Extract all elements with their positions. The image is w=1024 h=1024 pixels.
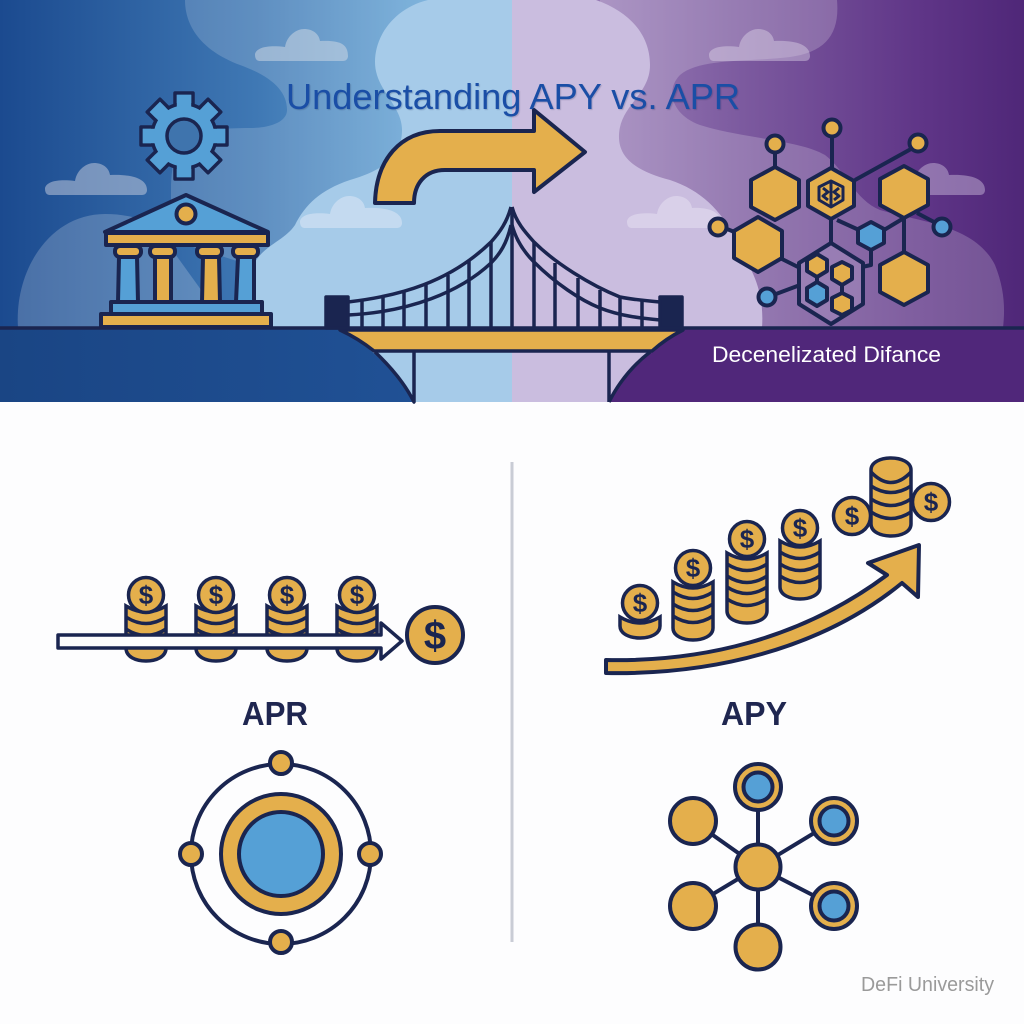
arrow: white timeline arrow — [58, 623, 402, 659]
coin stack — [267, 578, 307, 661]
coin stack: $ — [350, 580, 365, 610]
blue hexagon — [858, 222, 884, 250]
panel: APR — [58, 578, 463, 953]
icon: blockchain hexagon network — [710, 120, 950, 324]
network connectors — [727, 137, 934, 294]
icon: orbit diagram — [180, 752, 381, 953]
right ground — [609, 328, 1024, 402]
hexagon — [880, 166, 928, 218]
icon: bank building — [101, 195, 271, 327]
arrow: compounding growth arrow — [606, 545, 919, 673]
ground line — [0, 326, 1024, 330]
coin stack with side coins — [834, 458, 950, 536]
bridge hangers — [362, 207, 642, 328]
hexagon — [734, 217, 782, 272]
coin stack — [727, 522, 767, 623]
panel: hero banner — [0, 0, 1024, 402]
coin stack — [196, 578, 236, 661]
cloud — [45, 163, 147, 195]
large coin: $ — [424, 614, 446, 658]
coin stack: $ — [686, 553, 701, 583]
coin stack — [620, 586, 660, 638]
heading: APR: APR — [242, 695, 308, 732]
coin stack with side coins: $ — [845, 501, 860, 531]
arrow: big curved arrow — [375, 110, 585, 203]
small hexagons — [807, 254, 852, 315]
title: Understanding APY vs. APR — [286, 76, 740, 117]
bridge towers — [326, 297, 348, 328]
cloud — [884, 163, 985, 195]
cloud — [255, 29, 348, 61]
coin stack: $ — [740, 524, 755, 554]
icon: growing coin stacks — [606, 458, 950, 673]
panel: traditional finance sky — [0, 0, 512, 402]
footer credit: DeFi University — [861, 974, 994, 996]
coin stack — [126, 578, 166, 661]
icon: linear coin stacks — [58, 578, 463, 663]
cloud — [627, 196, 721, 228]
divider — [510, 462, 514, 942]
coin stack: $ — [633, 588, 648, 618]
large coin — [407, 607, 463, 663]
hexagon — [751, 167, 799, 220]
cloud — [300, 196, 402, 228]
hexagon with token mark — [808, 168, 854, 219]
cloud — [709, 29, 810, 61]
icon: bridge — [326, 207, 683, 402]
coin stack: $ — [209, 580, 224, 610]
icon: gear — [141, 93, 227, 179]
icon: hub and spoke network — [670, 764, 857, 970]
coin stack: $ — [139, 580, 154, 610]
heading: APY: APY — [721, 695, 787, 732]
coin stack: $ — [793, 513, 808, 543]
label: decentralized finance: Decenelizated Difance — [712, 342, 941, 367]
bridge supports — [375, 352, 650, 402]
coin stack with side coins: $ — [924, 487, 939, 517]
coin stack — [337, 578, 377, 661]
coin stack — [673, 550, 713, 640]
network nodes — [710, 120, 950, 306]
panel: APY — [606, 458, 950, 970]
panel: decentralized finance sky — [512, 0, 1024, 402]
bridge deck — [340, 330, 683, 351]
coin stack — [780, 510, 820, 599]
bridge cables — [348, 207, 660, 320]
hexagon — [880, 252, 928, 305]
left ground — [0, 328, 414, 402]
coin stack: $ — [280, 580, 295, 610]
large outlined hexagon — [799, 243, 863, 324]
